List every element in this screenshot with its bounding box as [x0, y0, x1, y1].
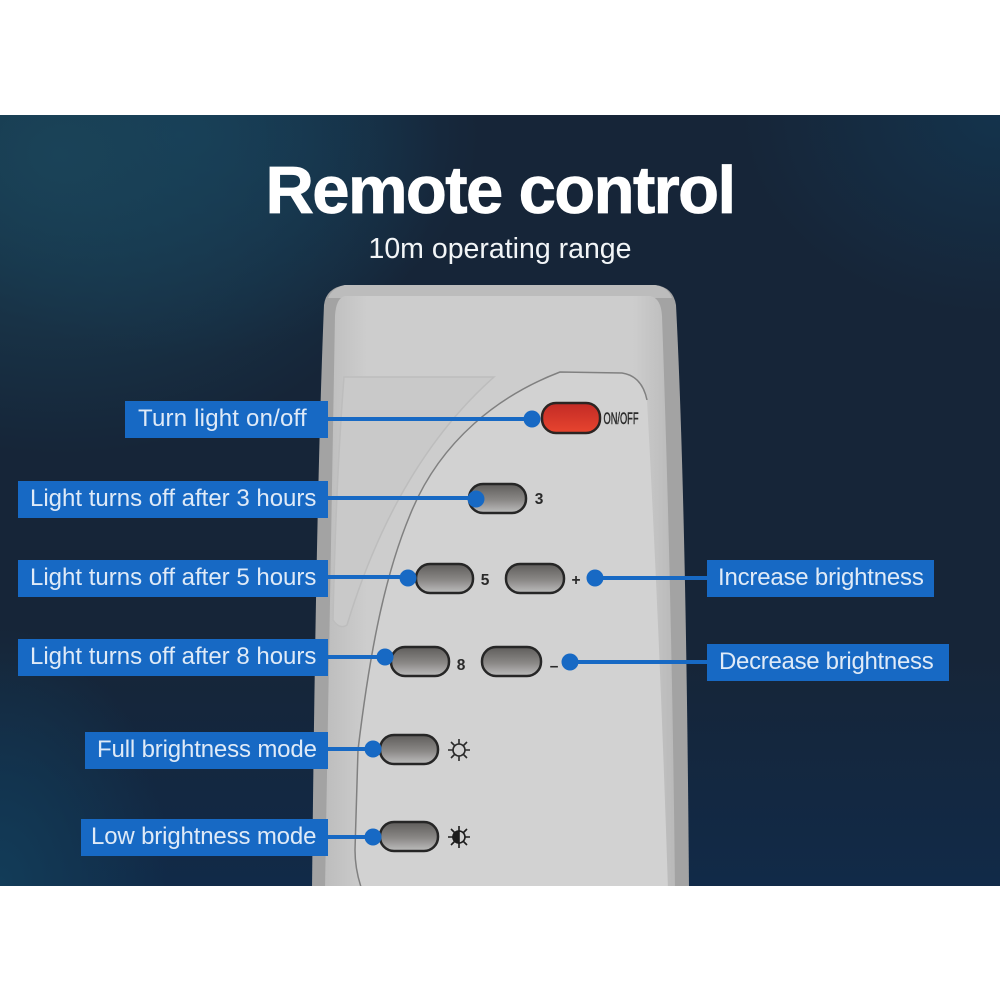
label: 5 hours: [18, 560, 328, 597]
label: 3 hours: Light turns off after 3 hours: [30, 485, 316, 512]
remote body: [312, 285, 689, 890]
label: turn light on/off: [125, 401, 328, 438]
label: full brightness mode: Full brightness mode: [97, 736, 317, 763]
label: low brightness mode: [81, 819, 328, 856]
callout lines and dots: [320, 410, 710, 846]
button plus: [506, 564, 564, 593]
label: 3 hours: [18, 481, 328, 518]
label: turn light on/off: Turn light on/off: [138, 405, 307, 432]
label: increase brightness: Increase brightness: [718, 564, 924, 591]
button labels: 8: [457, 657, 466, 674]
button labels: 5: [481, 572, 490, 589]
label: increase brightness: [707, 560, 934, 597]
button full brightness: [380, 735, 438, 764]
label: 5 hours: Light turns off after 5 hours: [30, 564, 316, 591]
button labels: 3: [535, 491, 544, 508]
label: 8 hours: Light turns off after 8 hours: [30, 643, 316, 670]
label: decrease brightness: [707, 644, 949, 681]
on/off button: [542, 403, 600, 433]
remote face: [325, 296, 675, 890]
button labels: +: [571, 572, 581, 589]
icon: full brightness sun: [448, 739, 470, 761]
button low brightness: [380, 822, 438, 851]
button labels: –: [550, 658, 559, 675]
button 8: [391, 647, 449, 676]
button panel edge: [355, 372, 647, 890]
label: full brightness mode: [85, 732, 328, 769]
button 3: [469, 484, 526, 513]
label: decrease brightness: Decrease brightness: [719, 648, 933, 675]
button labels: ON/OFF: [604, 409, 638, 428]
title: Remote control: [266, 153, 734, 228]
label: 8 hours: [18, 639, 328, 676]
remote top bevel: [328, 285, 672, 298]
button labels: [457, 409, 638, 675]
icon: low brightness sun: [448, 826, 470, 848]
recessed panel: [333, 377, 494, 627]
button minus: [482, 647, 541, 676]
remote control illustration: [312, 285, 707, 886]
button panel: [355, 372, 668, 890]
subtitle: 10m operating range: [368, 233, 632, 265]
label: low brightness mode: Low brightness mode: [91, 823, 316, 850]
background panel: [0, 115, 1000, 886]
button 5: [416, 564, 473, 593]
